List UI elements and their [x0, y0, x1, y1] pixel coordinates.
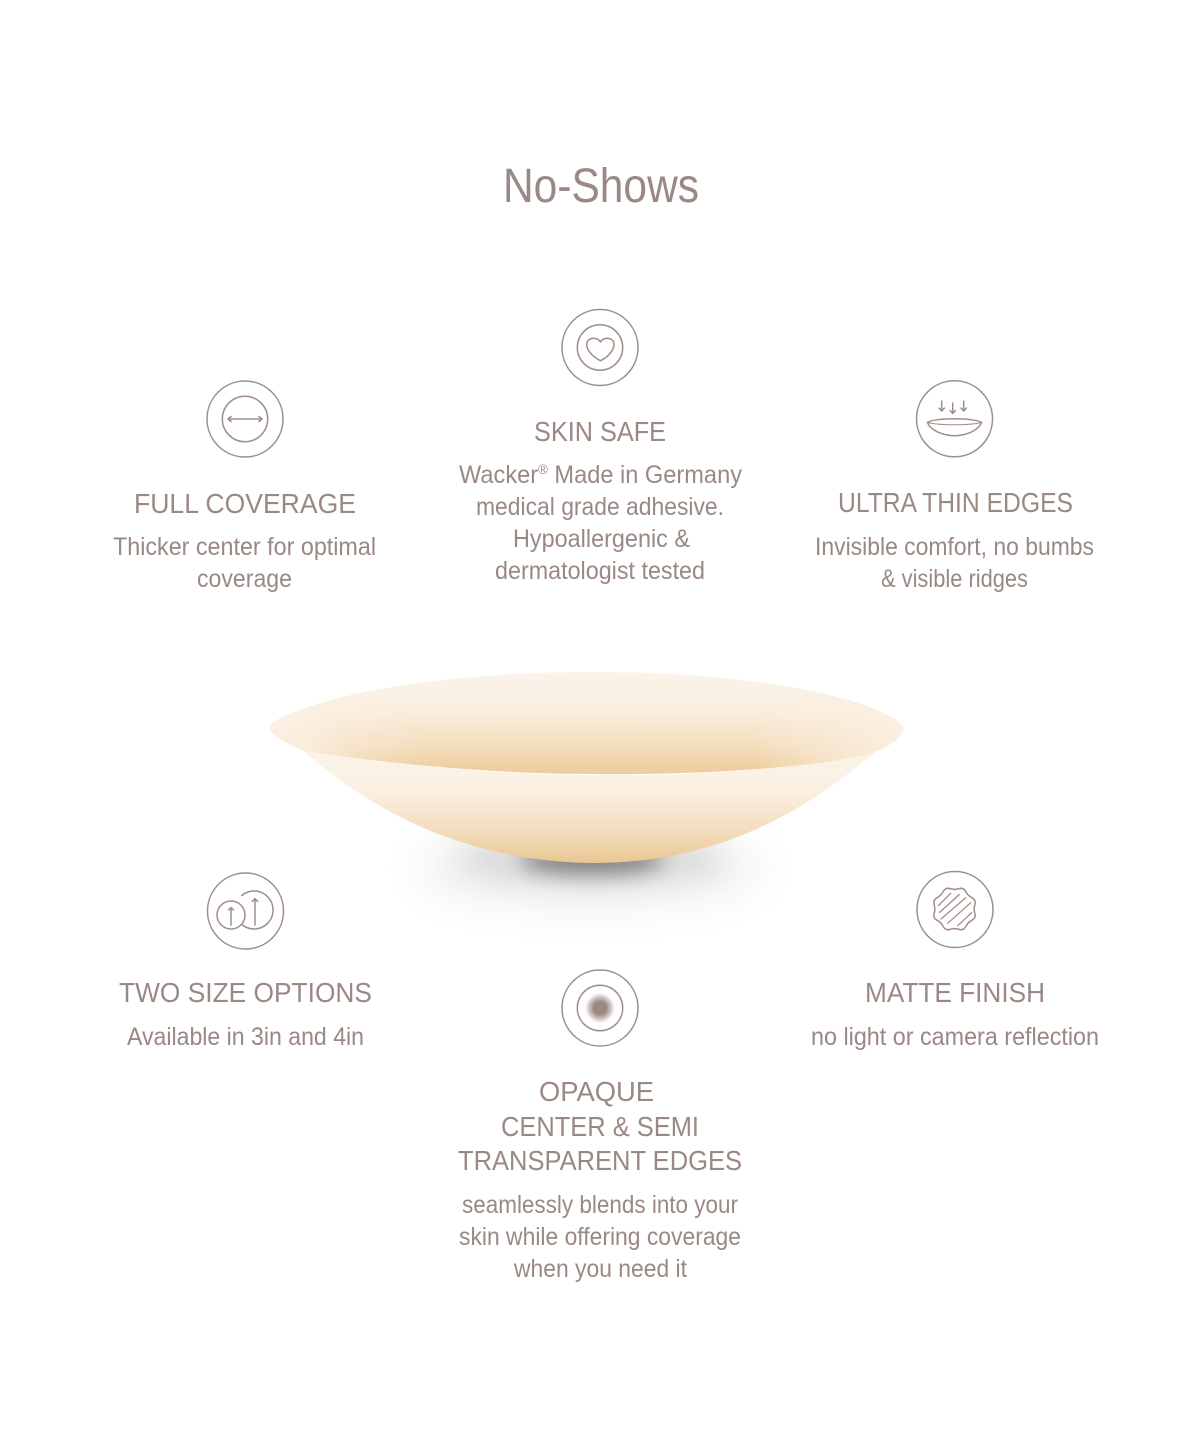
text: ultra thin edges description [815, 533, 1094, 593]
text: ultra thin edges description: & visible ridges [881, 565, 1028, 593]
text: opaque center description: skin while offering coverage [459, 1223, 741, 1251]
heading: opaque center and semi transparent edges [458, 1076, 742, 1176]
text: skin safe description: Hypoallergenic & [513, 525, 690, 553]
panel: ultra thin edges [815, 381, 1094, 593]
text: ultra thin edges description: Invisible comfort, no bumbs [815, 533, 1094, 561]
text: skin safe description: ® [538, 461, 549, 477]
text: skin safe description [459, 461, 742, 585]
text: opaque center description: when you need it [513, 1255, 687, 1283]
heading: matte finish: MATTE FINISH [865, 977, 1045, 1008]
product image: nude silicone cup [270, 672, 903, 904]
text: full coverage description [113, 533, 376, 593]
cup outer surface [303, 751, 875, 863]
heading: two size options: TWO SIZE OPTIONS [119, 977, 372, 1008]
heading: opaque center and semi transparent edges: CENTER & SEMI [501, 1111, 699, 1142]
text: skin safe description: medical grade adhesive. [476, 493, 724, 521]
heading: opaque center and semi transparent edges: OPAQUE [539, 1076, 654, 1107]
title: No-Shows [503, 160, 699, 213]
heading: opaque center and semi transparent edges: TRANSPARENT EDGES [458, 1145, 742, 1176]
heading: full coverage: FULL COVERAGE [134, 488, 356, 519]
panel: full coverage [113, 381, 376, 593]
text: opaque center description: seamlessly blends into your [462, 1191, 738, 1219]
icon: heart [562, 310, 638, 386]
text: opaque center description [459, 1191, 741, 1283]
heading: skin safe: SKIN SAFE [534, 416, 666, 447]
text: skin safe description: Made in Germany [548, 461, 742, 489]
panel: opaque center [458, 970, 742, 1283]
icon: opaque dot in rings [562, 970, 638, 1046]
panel: two size options [119, 873, 372, 1051]
text: skin safe description: dermatologist tested [495, 557, 705, 585]
text: full coverage description: Thicker center for optimal [113, 533, 376, 561]
heading: ultra thin edges: ULTRA THIN EDGES [838, 487, 1073, 518]
text: full coverage description: coverage [197, 565, 292, 593]
icon: two circles with arrows [208, 873, 284, 949]
icon: hatched scalloped disc [917, 872, 993, 948]
cup inner surface [270, 672, 903, 774]
icon: full coverage arrow [207, 381, 283, 457]
cup shadow [415, 832, 765, 904]
text: matte finish description: no light or camera reflection [811, 1023, 1099, 1051]
icon: thin edge lens with arrows [916, 381, 992, 457]
text: skin safe description: Wacker [459, 461, 543, 489]
text: two size options description: Available in 3in and 4in [127, 1023, 364, 1051]
panel: skin safe [459, 310, 742, 585]
panel: matte finish [811, 872, 1099, 1051]
cup inner edge highlights [270, 672, 903, 774]
